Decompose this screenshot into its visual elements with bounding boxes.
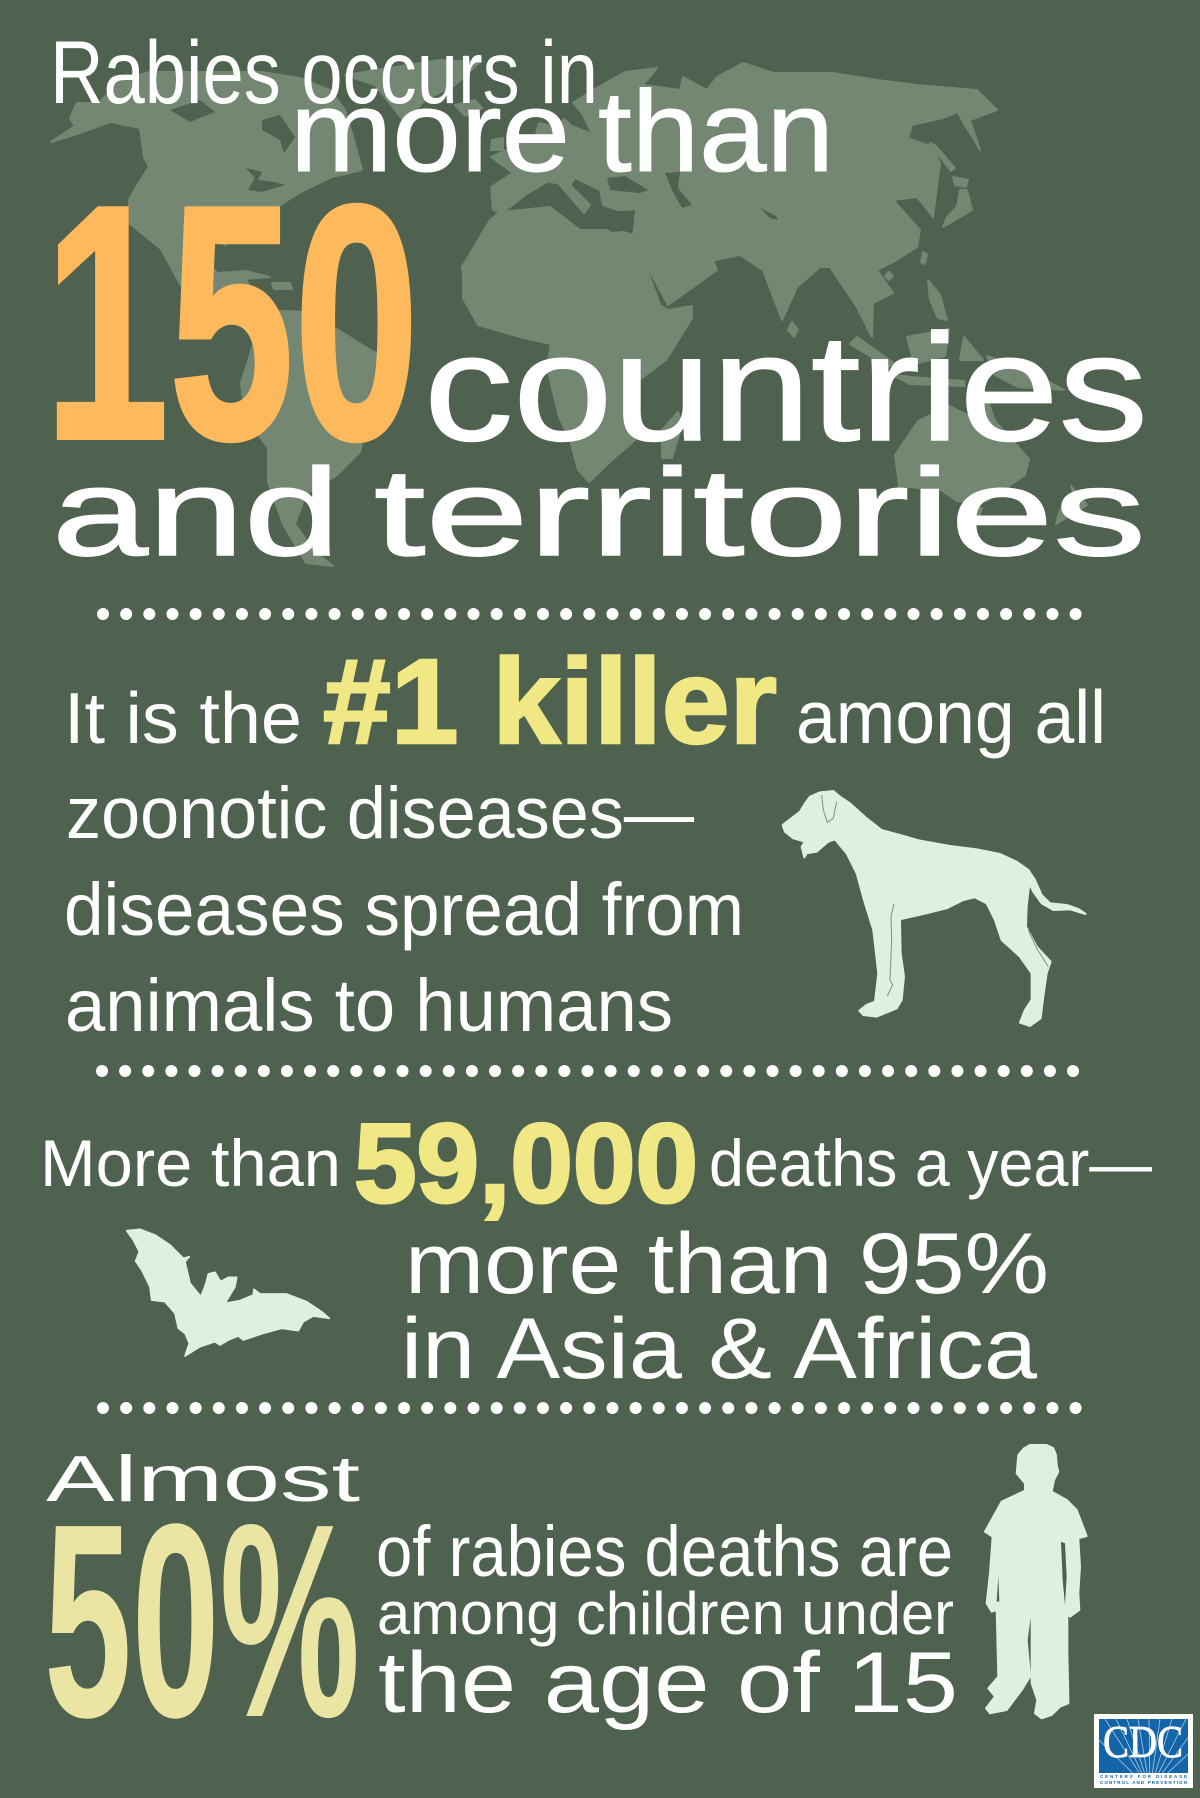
heading: rabies occurs in more than 150 countries and territories bbox=[44, 22, 1148, 582]
text: It is the: It is the bbox=[64, 679, 302, 759]
big number: 150: 150 bbox=[44, 136, 419, 509]
logo: CDC bbox=[1094, 1714, 1193, 1790]
text: More than: More than bbox=[40, 1126, 341, 1200]
text: among all: among all bbox=[796, 675, 1106, 759]
heading line: Rabies occurs in: Rabies occurs in bbox=[50, 22, 598, 122]
icon: bat silhouette bbox=[127, 1229, 329, 1356]
text: the age of 15: the age of 15 bbox=[378, 1635, 958, 1731]
heading line: more: more bbox=[290, 68, 570, 196]
highlight: #1 killer: #1 killer bbox=[323, 633, 777, 769]
text: in Asia and Africa: in Asia & Africa bbox=[401, 1301, 1037, 1397]
heading line: territories: territories bbox=[374, 444, 1146, 582]
text: zoonotic diseases: zoonotic diseases— bbox=[66, 773, 694, 854]
text: deaths a year: deaths a year— bbox=[709, 1126, 1152, 1200]
text: of rabies deaths are: of rabies deaths are bbox=[376, 1513, 953, 1592]
icon: child silhouette bbox=[985, 1445, 1087, 1718]
logo: CDC: CONTROL AND PREVENTION bbox=[1100, 1780, 1187, 1785]
text: Almost: Almost bbox=[46, 1442, 360, 1515]
panel: children statistic text bbox=[44, 1442, 958, 1775]
world map background bbox=[51, 55, 1087, 566]
icon: dog silhouette bbox=[783, 791, 1086, 1026]
panel: number one killer text bbox=[64, 633, 1106, 1047]
text: animals to humans: animals to humans bbox=[65, 964, 673, 1047]
heading line: and: and bbox=[52, 444, 340, 582]
text: among children under: among children under bbox=[377, 1580, 954, 1647]
heading line: countries: countries bbox=[424, 303, 1148, 473]
panel: deaths per year text bbox=[40, 1101, 1152, 1397]
text: more than 95%: more than 95% bbox=[405, 1216, 1049, 1312]
heading line: than: than bbox=[598, 68, 834, 196]
text: diseases spread from: diseases spread from bbox=[64, 868, 744, 951]
highlight: 50%: 50% bbox=[44, 1467, 360, 1775]
highlight: 59,000: 59,000 bbox=[354, 1101, 698, 1226]
logo: CDC: CENTERS FOR DISEASE bbox=[1100, 1774, 1187, 1779]
